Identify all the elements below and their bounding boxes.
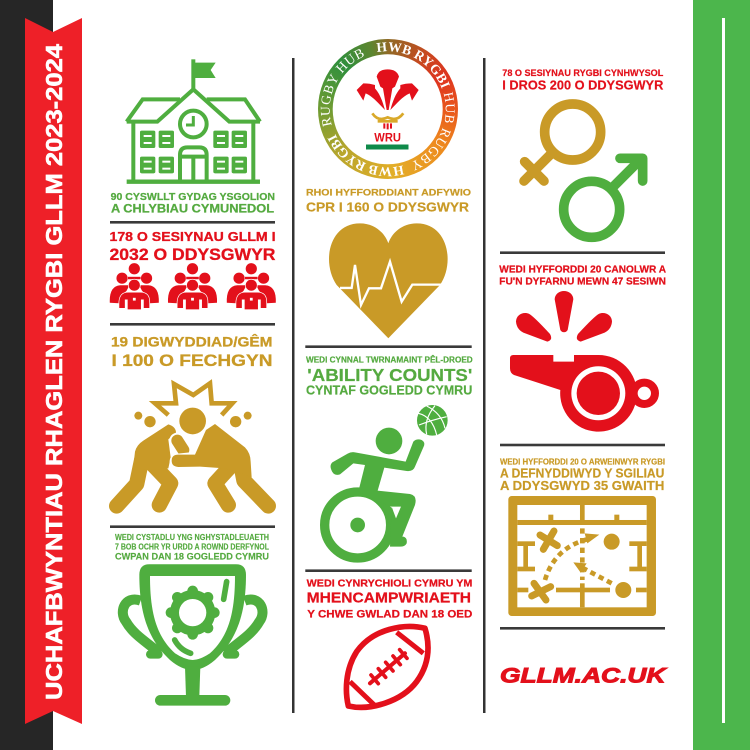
text: sessions <box>110 229 276 264</box>
text: Ability Counts: CYNTAF GOGLEDD CYMRU <box>306 383 472 397</box>
text: leaders: WEDI HYFFORDDI 20 O ARWEINWYR RYGBI <box>500 457 665 466</box>
logo: Hwb Rygbi roundel: RUGBY HUB <box>320 49 364 127</box>
text: Six Nations <box>307 579 472 621</box>
text: leaders: A DDYSGWYD 35 GWAITH <box>500 479 664 493</box>
icon: trophy <box>123 564 263 706</box>
text: competition: WEDI CYSTADLU YNG NGHYSTADLEUAETH <box>115 533 269 542</box>
icon: tactics board <box>508 496 656 616</box>
icon: whistle <box>510 291 655 432</box>
icon: three feathers emblem <box>357 69 419 129</box>
text: school links: A CHLYBIAU CYMUNEDOL <box>111 203 274 216</box>
text: Six Nations: WEDI CYNRYCHIOLI CYMRU YM <box>307 579 472 590</box>
text: referees: WEDI HYFFORDDI 20 CANOLWR A <box>499 264 666 275</box>
text: competition: 7 BOB OCHR YR URDD A ROWND DERFYNOL <box>115 542 269 551</box>
icon: heart with pulse <box>329 223 448 338</box>
logo: Hwb Rygbi roundel: HUB RUGBY <box>412 92 455 171</box>
text: Six Nations: Y CHWE GWLAD DAN 18 OED <box>307 609 472 621</box>
logo ring: Hwb Rygbi colour gradient <box>318 39 458 179</box>
icon: wrestlers <box>117 383 268 506</box>
text: leaders: A DEFNYDDIWYD Y SGILIAU <box>500 467 664 481</box>
text: Ability Counts <box>306 355 473 397</box>
text: school links: 90 CYSWLLT GYDAG YSGOLION <box>111 192 275 203</box>
text: referees <box>499 264 666 287</box>
icon: wheelchair athlete with ball <box>325 405 448 558</box>
icon: school building <box>127 59 260 182</box>
title ribbon: UCHAFBWYNTIAU RHAGLEN RYGBI GLLM 2023-2024 <box>41 44 67 700</box>
text: competition: CWPAN DAN 18 GOGLEDD CYMRU <box>115 551 269 562</box>
logo: Hwb Rygbi roundel: WRU <box>374 133 401 145</box>
text: leaders <box>500 457 665 493</box>
right green band <box>693 0 750 750</box>
text: inclusive sessions: I DROS 200 O DDYSGWYR <box>502 78 663 92</box>
text: sessions: 178 O SESIYNAU GLLM I <box>110 229 276 244</box>
text: Six Nations: MHENCAMPWRIAETH <box>307 590 471 607</box>
text: events: 19 DIGWYDDIAD/GÊM <box>111 333 272 350</box>
text: competition <box>115 533 269 562</box>
logo: Hwb Rygbi roundel <box>320 42 455 176</box>
text: CPR training: RHOI HYFFORDDIANT ADFYWIO <box>306 187 471 198</box>
icon: groups of people <box>110 263 276 310</box>
text: Ability Counts: 'ABILITY COUNTS' <box>307 365 472 385</box>
text: school links <box>111 192 275 216</box>
logo: Hwb Rygbi roundel: HWB RYGBI <box>376 42 450 89</box>
text: CPR training <box>306 187 471 215</box>
icon: female and male symbols <box>524 104 643 237</box>
text: events: I 100 O FECHGYN <box>112 351 272 370</box>
text: Ability Counts: WEDI CYNNAL TWRNAMAINT PÊL-DROED <box>306 355 473 364</box>
title ribbon <box>25 18 82 724</box>
text: sessions: 2032 O DDYSGWYR <box>110 246 276 264</box>
text: CPR training: CPR I 160 O DDYSGWYR <box>306 200 470 215</box>
icon: rugby ball <box>346 627 428 707</box>
left dark band <box>0 0 53 750</box>
text: referees: FU'N DYFARNU MEWN 47 SESIWN <box>499 276 666 287</box>
text: inclusive sessions <box>502 68 664 92</box>
text: inclusive sessions: 78 O SESIYNAU RYGBI CYNHWYSOL <box>502 68 664 78</box>
website address: GLLM.AC.UK <box>500 665 668 688</box>
column dividers <box>292 58 486 713</box>
text: events <box>111 333 272 370</box>
logo: Hwb Rygbi roundel: HWB RYGBI <box>328 134 404 176</box>
